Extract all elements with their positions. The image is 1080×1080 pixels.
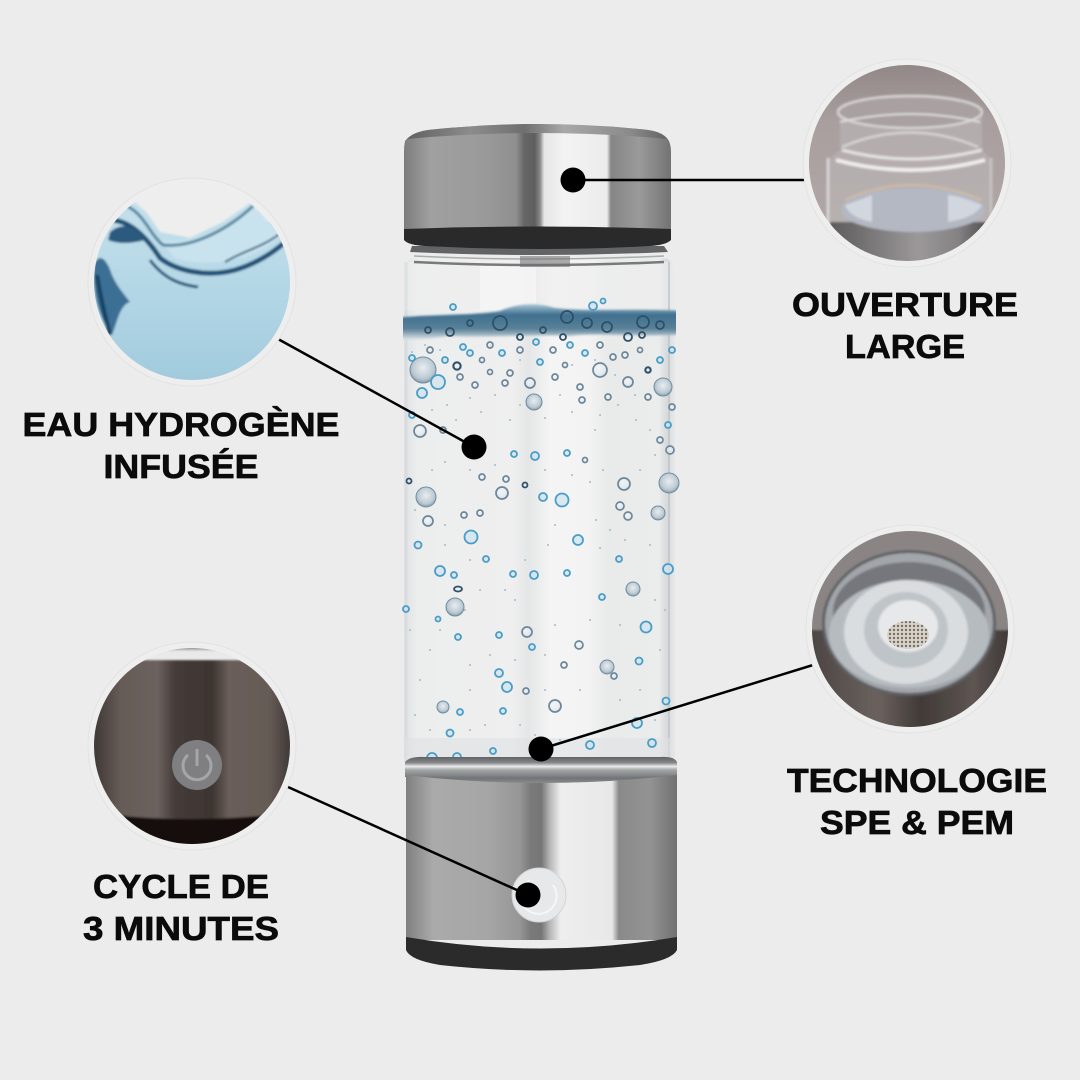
large bubbles: [410, 357, 679, 713]
detail circle: wide opening: [803, 59, 1011, 272]
speckles: [410, 345, 665, 740]
left dark swirl: [94, 258, 130, 335]
label: wide opening: OUVERTURE: [792, 286, 1018, 323]
water level: [829, 220, 986, 261]
dark surface bubbles: [406, 311, 664, 592]
steel cap: [404, 124, 671, 249]
blue ring bubbles: [403, 298, 675, 763]
glass rim: [822, 550, 996, 696]
steel base: [406, 775, 677, 970]
label: SPE and PEM technology: [787, 762, 1047, 841]
bottle glass body: [404, 258, 675, 768]
connector: wide opening: [560, 168, 805, 192]
water body: [94, 202, 290, 380]
label: 3 minute cycle: CYCLE DE: [93, 868, 269, 905]
detail circle: water: [88, 178, 296, 395]
wave crest stripes: [113, 220, 284, 273]
icon: electrode mesh: [887, 621, 929, 649]
hydrogen bubbles: [403, 298, 679, 763]
connector: SPE PEM technology: [528, 665, 813, 762]
label: 3 minute cycle: 3 MINUTES: [83, 910, 279, 947]
label: wide opening: [792, 286, 1018, 365]
label: hydrogen-infused water: [22, 406, 340, 485]
power button: [512, 868, 566, 922]
grey ring bubbles: [414, 342, 675, 712]
label: wide opening: LARGE: [845, 328, 965, 365]
detail circle: power button: [88, 642, 296, 850]
label: SPE and PEM technology: SPE & PEM: [820, 804, 1014, 841]
label: 3 minute cycle: [83, 868, 279, 947]
jar neck: [830, 118, 989, 222]
glass neck: [410, 246, 668, 267]
detail circle: electrolysis technology: [805, 525, 1015, 733]
label: hydrogen-infused water: EAU HYDROGÈNE: [22, 406, 340, 443]
label: hydrogen-infused water: INFUSÉE: [104, 448, 258, 485]
connector: hydrogen water: [278, 339, 486, 460]
product: hydrogen water bottle: [395, 124, 685, 970]
label: SPE and PEM technology: TECHNOLOGIE: [787, 762, 1047, 799]
connector: 3 minute cycle: [288, 787, 540, 908]
icon: power button glyph: [172, 740, 222, 790]
water surface wave: [395, 304, 685, 340]
glass collar at base: [405, 757, 677, 784]
